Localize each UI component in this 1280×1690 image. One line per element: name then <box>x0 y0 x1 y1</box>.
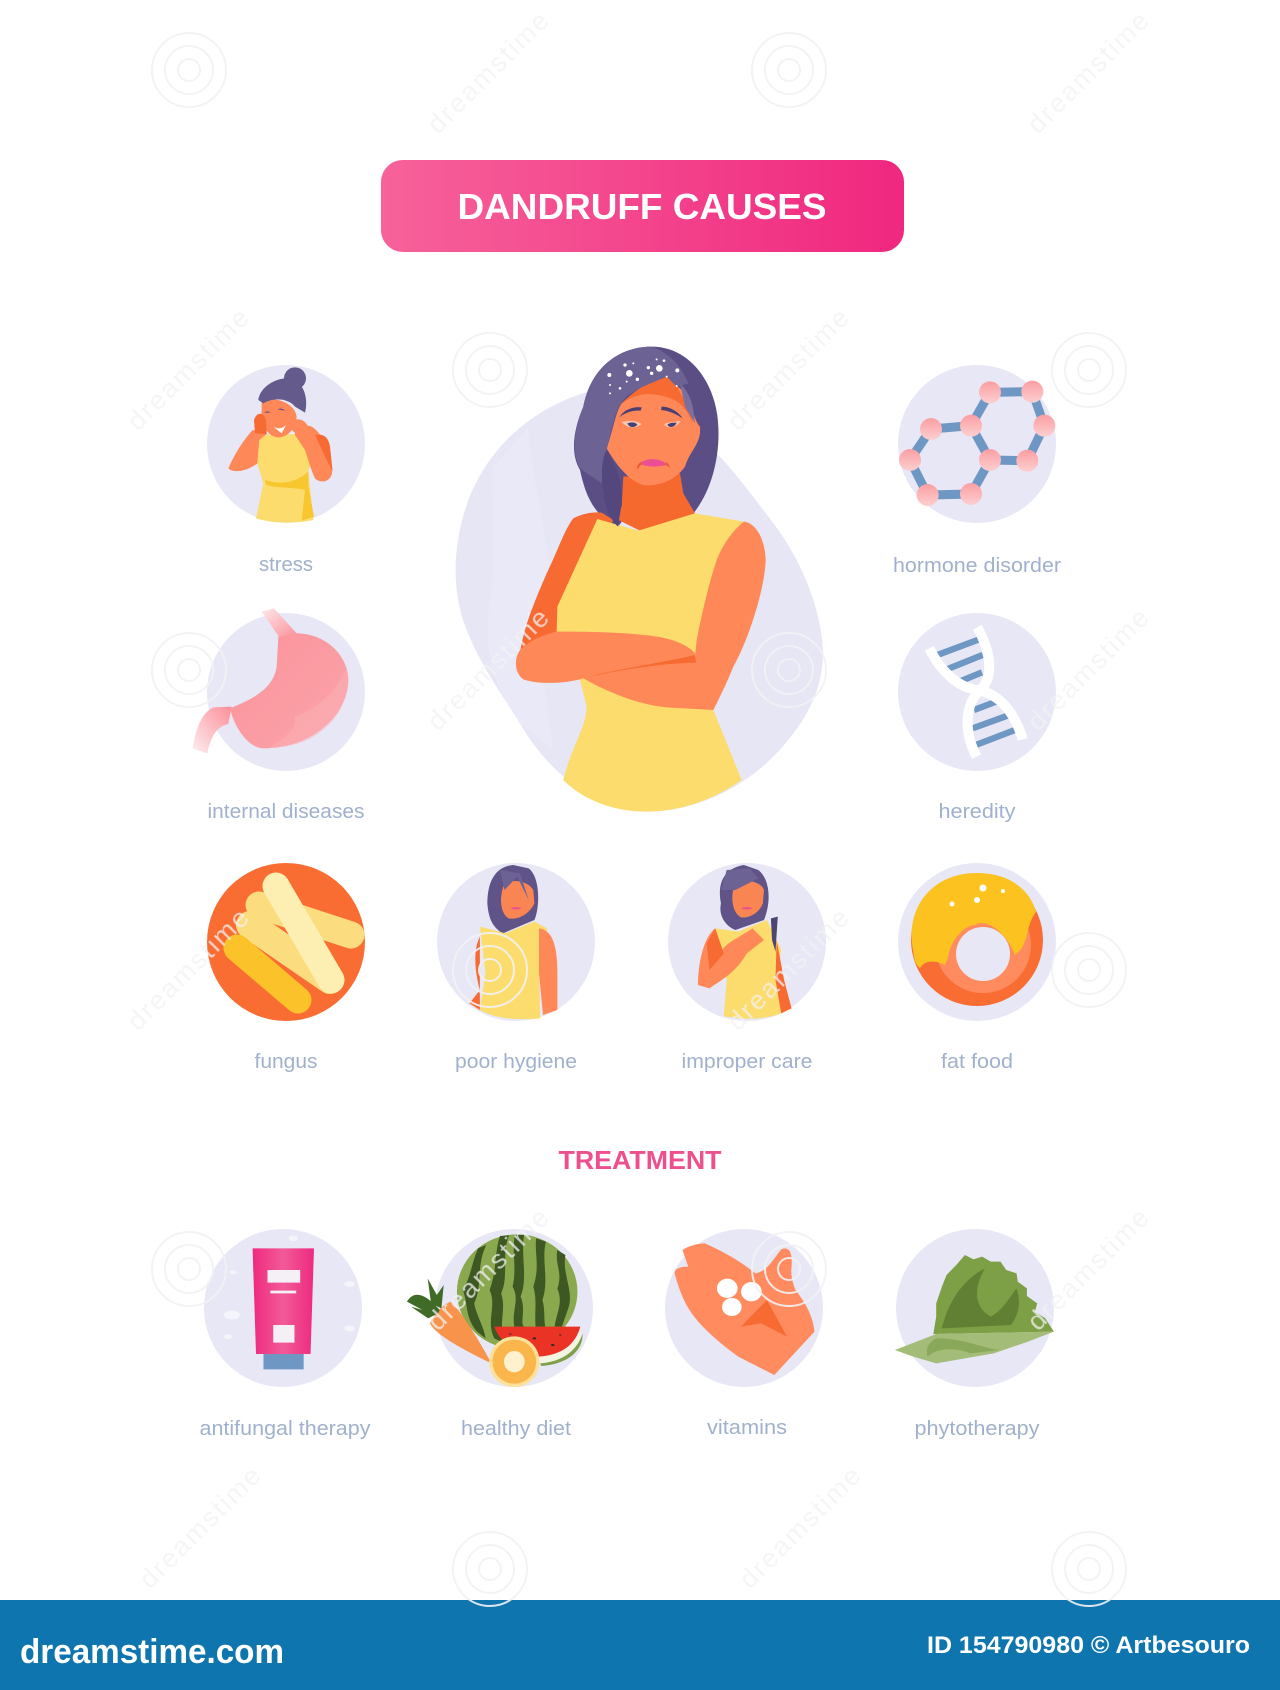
right arm <box>583 522 766 710</box>
watermark text: dreamstime <box>133 1459 268 1594</box>
watermark text: dreamstime <box>121 301 256 436</box>
face <box>607 383 700 485</box>
circle background <box>665 1229 823 1387</box>
label: fat food <box>941 1051 1013 1073</box>
watermark text: dreamstime <box>421 1201 556 1336</box>
title banner: DANDRUFF CAUSES <box>458 186 826 227</box>
icon: green leaves <box>895 1255 1054 1363</box>
icon: stressed woman <box>228 367 333 523</box>
footer logo: dreamstime.com <box>20 1633 284 1671</box>
neck <box>612 473 695 531</box>
label: hormone disorder <box>893 555 1061 577</box>
dress <box>557 513 744 812</box>
panel: central woman with dandruff <box>456 347 823 812</box>
circle background <box>204 1229 362 1387</box>
crossed forearm <box>516 632 695 683</box>
icon: fungus on orange disc <box>207 863 365 1021</box>
label: vitamins <box>707 1417 787 1439</box>
circle background <box>207 365 365 523</box>
watermark text <box>121 4 1156 1594</box>
eye pupils <box>627 422 677 427</box>
footer bar <box>0 1600 1280 1690</box>
panel: phytotherapy <box>895 1229 1054 1440</box>
icon: glazed donut <box>911 873 1043 1006</box>
circle background <box>898 863 1056 1021</box>
circle background <box>896 1229 1054 1387</box>
watermark text: dreamstime <box>721 301 856 436</box>
panel: poor hygiene <box>437 863 595 1073</box>
watermark text: dreamstime <box>421 4 556 139</box>
icon: molecule <box>899 381 1055 506</box>
icon: watermelon, carrot and orange <box>407 1234 583 1387</box>
label: internal diseases <box>208 801 364 823</box>
icon: woman with hair loss <box>698 865 792 1019</box>
label: phytotherapy <box>914 1418 1040 1440</box>
footer credit: ID 154790980 © Artbesouro <box>927 1632 1250 1659</box>
panel: hormone disorder <box>893 365 1061 577</box>
circle background <box>437 863 595 1021</box>
hair lower tuft <box>602 450 622 527</box>
eyes <box>622 421 681 427</box>
icon: hand holding pills <box>675 1243 815 1375</box>
frown line <box>637 461 670 469</box>
label: stress <box>259 554 313 576</box>
label: heredity <box>938 801 1016 823</box>
panel: healthy diet <box>407 1229 593 1440</box>
icon: woman with unwashed hair <box>470 865 557 1019</box>
watermark text: dreamstime <box>733 1459 868 1594</box>
panel: improper care <box>668 863 826 1073</box>
watermark text: dreamstime <box>121 901 256 1036</box>
watermark text: dreamstime <box>721 901 856 1036</box>
label: fungus <box>254 1051 318 1073</box>
background blob <box>456 392 823 812</box>
panel: fat food <box>898 863 1056 1073</box>
watermark text: dreamstime <box>421 601 556 736</box>
circle background <box>668 863 826 1021</box>
forehead shadow <box>620 377 693 423</box>
label: antifungal therapy <box>200 1418 370 1440</box>
panel: antifungal therapy <box>200 1229 370 1440</box>
right hair shade <box>680 383 695 423</box>
watermark text: dreamstime <box>1021 601 1156 736</box>
title banner <box>381 160 904 252</box>
heading: treatment: TREATMENT <box>558 1145 722 1175</box>
mouth <box>640 459 667 467</box>
watermark text: dreamstime <box>1021 1201 1156 1336</box>
dandruff flakes <box>607 358 679 394</box>
hair back <box>574 347 719 527</box>
label: healthy diet <box>461 1418 571 1440</box>
circle background <box>898 365 1056 523</box>
circle background <box>207 613 365 771</box>
panel: vitamins <box>665 1229 823 1439</box>
panel: stress <box>207 365 365 576</box>
watermark spirals <box>152 33 1126 1606</box>
circle background <box>435 1229 593 1387</box>
label: improper care <box>682 1051 812 1073</box>
panel: internal diseases <box>193 608 365 823</box>
hair front lock <box>575 347 688 483</box>
panel: fungus <box>207 863 365 1073</box>
eyebrows <box>619 407 683 418</box>
icon: cream tube <box>224 1236 355 1369</box>
left arm upper <box>520 512 613 653</box>
watermark text: dreamstime <box>1021 4 1156 139</box>
icon: stomach <box>193 608 348 753</box>
circle background <box>898 613 1056 771</box>
arm crease <box>587 655 696 677</box>
panel: heredity <box>898 613 1056 823</box>
icon: DNA helix <box>929 627 1023 757</box>
label: poor hygiene <box>455 1051 577 1073</box>
blob highlight <box>488 427 553 750</box>
